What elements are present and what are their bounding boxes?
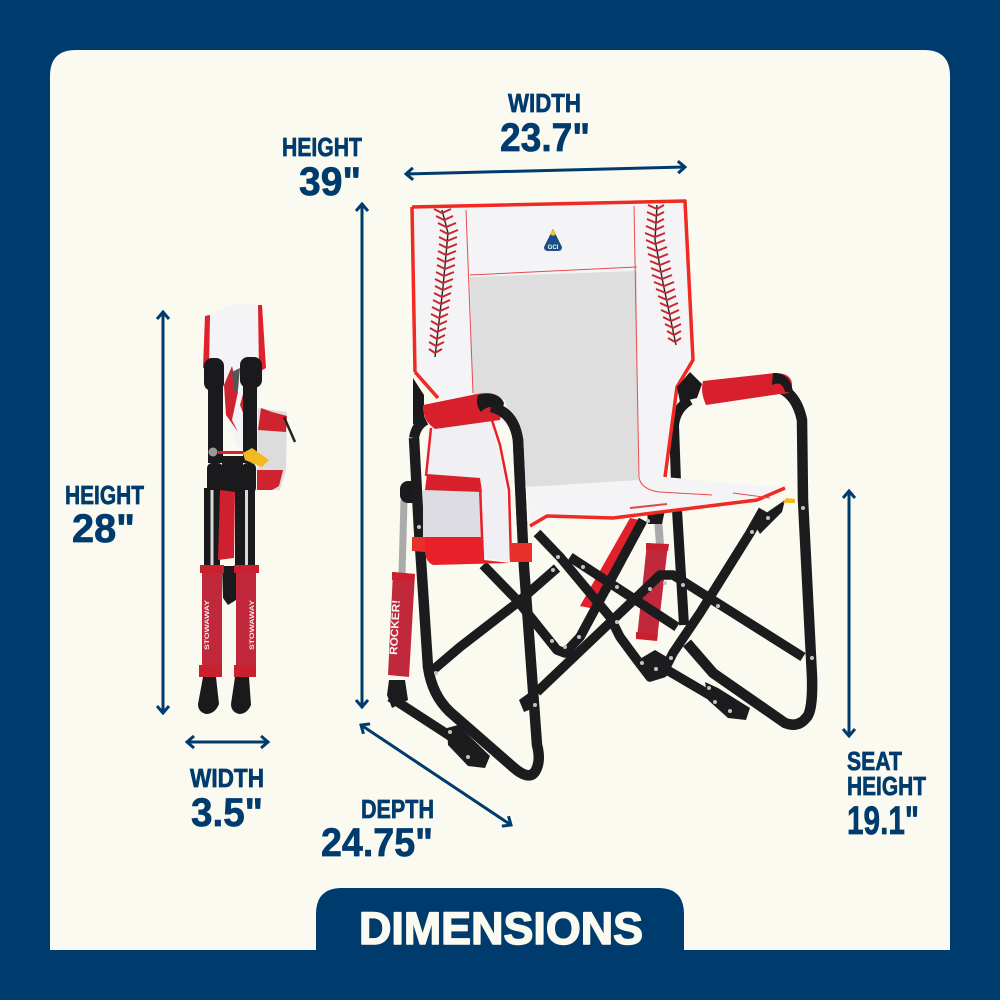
label: folded width [190, 763, 264, 835]
folded chair: red cloth [218, 490, 235, 560]
chair: right upright frame [674, 400, 690, 625]
chair: back and seat fabric [412, 201, 795, 526]
label: seat height: 19.1" [847, 799, 919, 843]
label: chair depth: 24.75" [321, 821, 433, 865]
folded chair: frame [204, 357, 262, 605]
chair: red cloth under seat [580, 518, 640, 608]
chair: left rear cylinder [388, 500, 415, 677]
folded chair: feet [198, 677, 251, 714]
title tab: dimensions: DIMENSIONS [359, 903, 643, 954]
chair: right upright hardware [677, 372, 702, 402]
chair: left baseball stitches [429, 209, 458, 357]
label: folded width: 3.5" [191, 791, 263, 835]
label: chair width: 23.7" [500, 116, 590, 160]
label: chair depth: DEPTH [361, 794, 434, 824]
folded chair: red cylinders: STOWAWAY [250, 600, 256, 650]
label: seat height [847, 746, 926, 843]
arrow: chair depth [361, 725, 511, 825]
chair: right front frame and runner [687, 387, 812, 725]
arrow: folded height [162, 312, 164, 713]
label: chair depth [321, 794, 434, 865]
chair: right armrest [702, 373, 793, 405]
label: chair height [282, 132, 362, 204]
chair: GCI logo: GCI [548, 245, 559, 251]
label: chair width [500, 88, 590, 160]
arrow: chair height [360, 204, 364, 707]
title tab: dimensions [316, 888, 684, 954]
chair: right rear cylinder [636, 518, 669, 641]
chair: feet and hinges [387, 500, 785, 768]
label: chair height: 39" [299, 160, 361, 204]
label: seat height: SEAT [847, 746, 902, 776]
label: folded height: HEIGHT [65, 480, 144, 510]
chair: left arm tube foreground [491, 407, 522, 525]
folded chair: yellow tag [243, 448, 269, 467]
folded chair: fabric [203, 303, 266, 448]
label: folded width: WIDTH [190, 763, 264, 793]
chair: right baseball stitches [645, 205, 681, 345]
folded chair: red cylinders [199, 565, 259, 677]
label: folded height: 28" [72, 507, 135, 551]
arrow: seat height [848, 491, 850, 736]
chair: rivets [417, 506, 814, 759]
chair: left armrest [423, 393, 504, 429]
rocking chair [387, 201, 814, 775]
arrow: chair width [406, 167, 685, 174]
chair: side pocket [412, 408, 532, 565]
label: seat height: HEIGHT [847, 771, 926, 801]
chair: left rear hardware [400, 378, 424, 503]
chair: GCI logo [544, 229, 562, 251]
chair: left front frame [414, 407, 539, 775]
folded chair [198, 303, 295, 714]
folded chair: cup pocket [257, 408, 295, 490]
label: folded height [65, 480, 144, 551]
chair: cross braces [390, 510, 803, 760]
chair: mesh panel [470, 271, 638, 487]
folded chair: red cylinders: STOWAWAY [205, 600, 211, 650]
chair: left rear cylinder: ROCKER! [388, 600, 403, 655]
label: chair height: HEIGHT [282, 132, 362, 162]
arrow: folded width [187, 740, 268, 744]
label: chair width: WIDTH [508, 88, 581, 118]
